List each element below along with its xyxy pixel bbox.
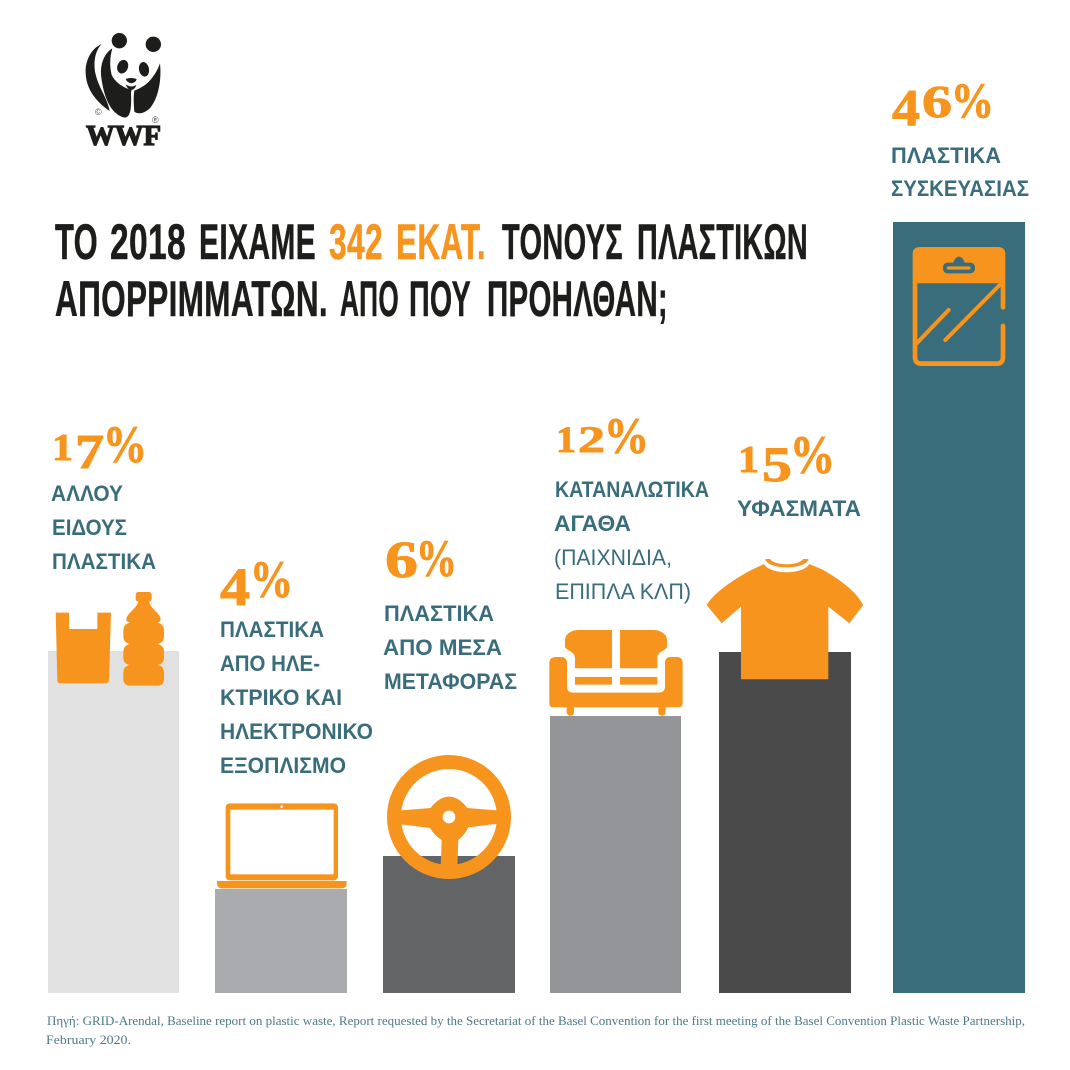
value: 46% [892,72,994,137]
label: consumer goods: ΕΠΙΠΛΑ ΚΛΠ) [555,579,691,604]
label: other plastics [51,481,156,574]
title: ΑΠΟ [340,271,399,327]
title [55,214,808,327]
bar: textiles 15% [719,652,851,993]
label: other plastics: ΠΛΑΣΤΙΚΑ [52,549,156,574]
title: ΕΙΧΑΜΕ [199,214,316,270]
logo: WWF panda: WWF [86,120,161,152]
label: electronics: ΠΛΑΣΤΙΚΑ [220,617,324,642]
value: 17%: 1 [52,427,73,469]
label: packaging: ΣΥΣΚΕΥΑΣΙΑΣ [891,176,1029,201]
title: ΠΟΥ [409,271,471,327]
label: electronics: ΗΛΕΚΤΡΟΝΙΚΟ [220,719,373,744]
bar: transport 6% [383,856,515,993]
title: 2018 [110,214,186,270]
icon: sofa [549,630,683,716]
value: 15%: 5 [762,436,792,492]
title: ΤΟ [55,214,98,270]
label: electronics: ΑΠΟ ΗΛΕ- [220,651,320,676]
source note [46,1013,1025,1047]
value: 46%: % [951,72,994,128]
label: transport: ΠΛΑΣΤΙΚΑ [384,601,494,626]
value: 6%: 6 [385,532,418,589]
value: 4% [220,552,293,617]
bar: consumer goods 12% [550,716,681,993]
value: 15% [738,425,835,492]
bar: electronics 4% [215,889,347,993]
label: packaging: ΠΛΑΣΤΙΚΑ [891,143,1001,168]
label: transport: ΑΠΟ ΜΕΣΑ [383,635,502,660]
value: 6%: % [416,531,457,588]
bar: packaging 46% [893,222,1025,993]
label: transport [383,601,517,694]
label: consumer goods: ΑΓΑΘΑ [554,511,631,536]
title: 342 [329,214,383,270]
logo: WWF panda: © [95,107,102,117]
value: 15%: 1 [738,439,759,481]
value: 46%: 4 [892,80,920,137]
source note: Πηγή: GRID-Arendal, Baseline report on plastic waste, Report requested by the Secretariat of the Basel Convention for the first meeting of the Basel Convention Plastic Waste Partnership, [47,1013,1025,1028]
value: 12%: 2 [578,420,605,461]
value: 46%: 6 [922,77,952,127]
label: consumer goods [554,477,709,604]
label: textiles: ΥΦΑΣΜΑΤΑ [737,496,861,521]
label: packaging [891,143,1029,201]
value: 12%: % [604,409,649,465]
title: ΑΠΟΡΡΙΜΜΑΤΩΝ. [55,271,328,327]
value: 17% [52,417,147,479]
label: electronics [220,617,373,778]
value: 12%: 1 [556,420,576,461]
logo: WWF panda [86,33,161,152]
label: consumer goods: (ΠΑΙΧΝΙΔΙΑ, [554,545,672,570]
label: other plastics: ΕΙΔΟΥΣ [52,515,127,540]
value: 6% [385,531,457,589]
icon: steering wheel [394,762,504,872]
value: 15%: % [790,425,835,485]
label: transport: ΜΕΤΑΦΟΡΑΣ [384,669,517,694]
bar: other plastics 17% [48,651,179,993]
label: other plastics: ΑΛΛΟΥ [51,481,123,506]
icon: laptop [217,803,347,888]
label: electronics: ΚΤΡΙΚΟ ΚΑΙ [220,685,342,710]
value: 4%: 4 [220,557,250,617]
value: 17%: 7 [75,424,104,479]
icon: plastic packaging [913,247,1005,364]
title: ΕΚΑΤ. [396,214,486,270]
label: electronics: ΕΞΟΠΛΙΣΜΟ [220,753,346,778]
value: 12% [556,409,649,465]
icon: t-shirt [707,559,863,679]
value: 4%: % [250,552,293,609]
title: ΠΡΟΗΛΘΑΝ; [487,271,668,327]
value: 17%: % [103,417,147,474]
title: ΠΛΑΣΤΙΚΩΝ [637,214,808,270]
title: ΤΟΝΟΥΣ [502,214,623,270]
label: consumer goods: ΚΑΤΑΝΑΛΩΤΙΚΑ [555,477,709,502]
source note: February 2020. [46,1032,131,1047]
logo: WWF panda: ® [152,115,159,125]
icon: plastic bag and bottle [56,592,164,686]
